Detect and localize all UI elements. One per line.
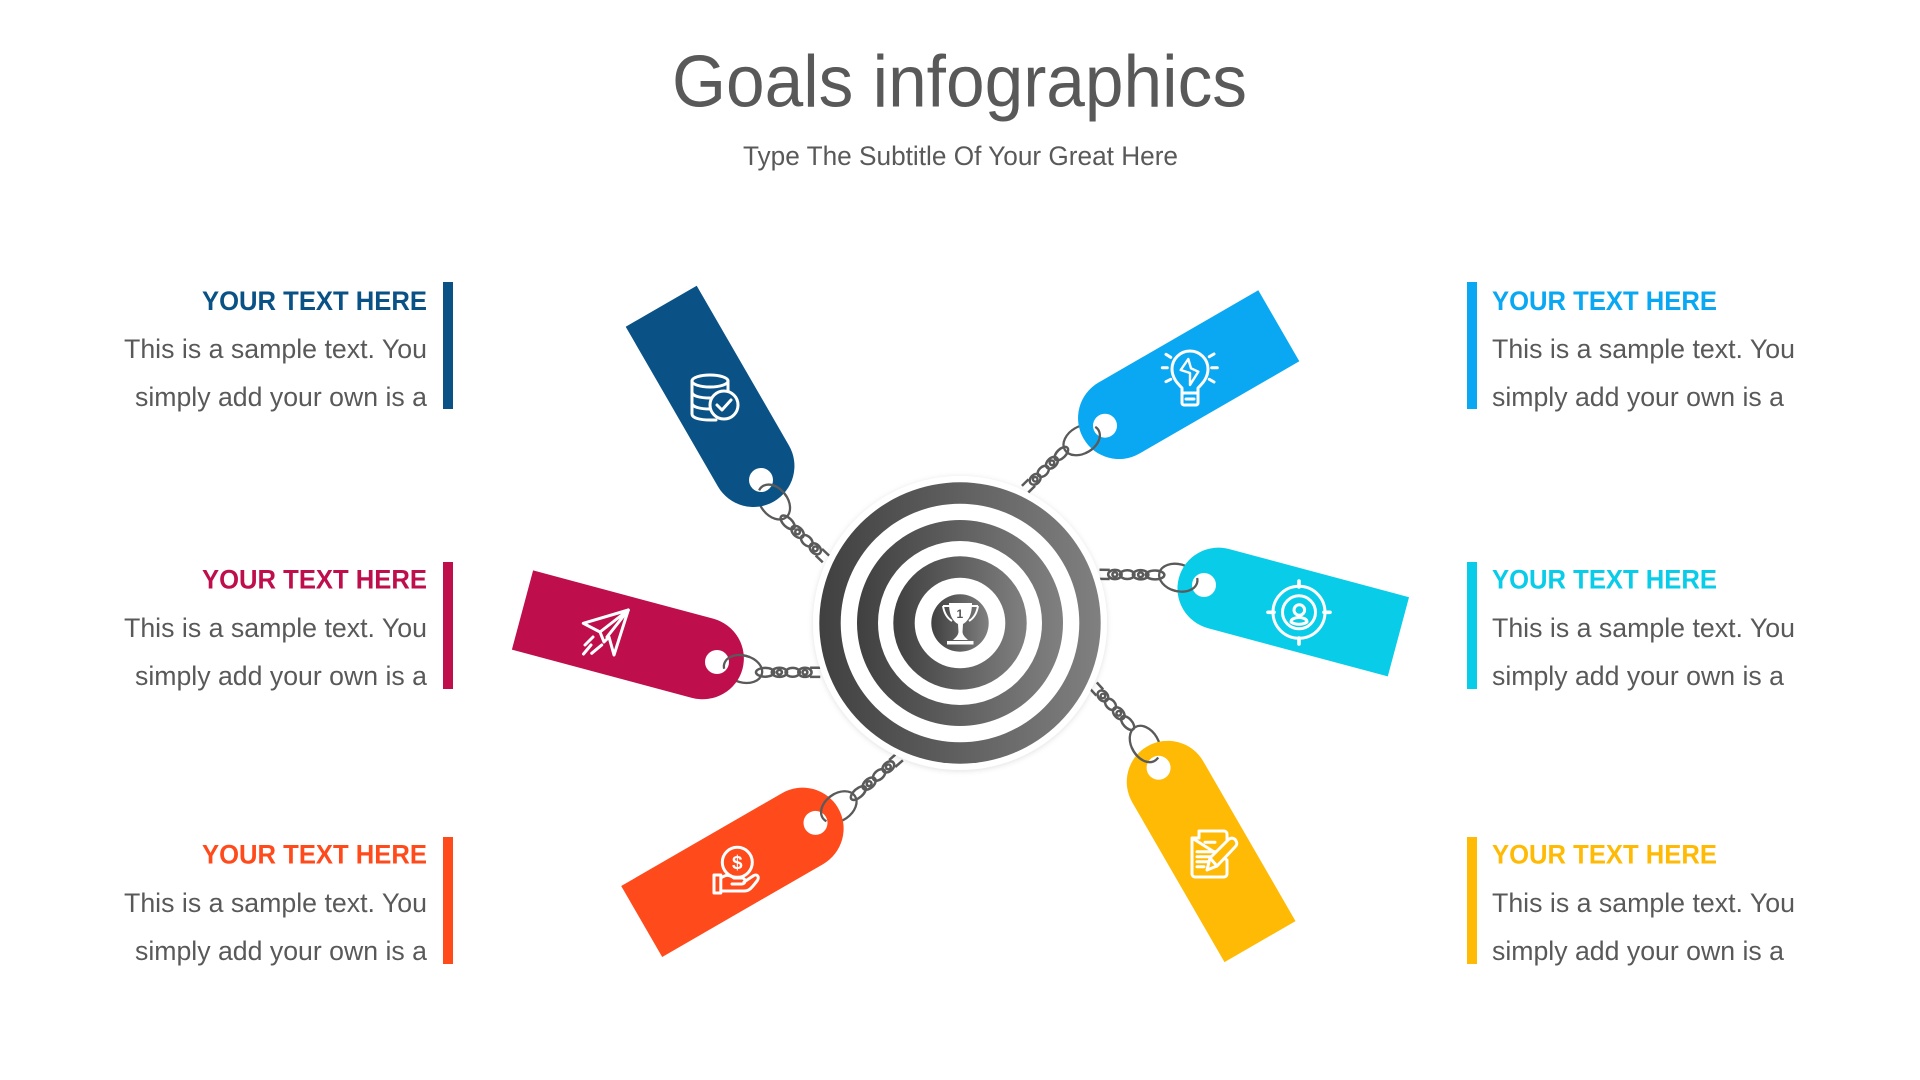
- ring 3: [893, 556, 1027, 690]
- heading: YOUR TEXT HERE: [1492, 564, 1717, 594]
- text block: bottom right: [1467, 837, 1795, 966]
- tag: light blue idea: [1022, 290, 1299, 492]
- tag shape: [1168, 538, 1409, 676]
- body line 2: simply add your own is a: [1492, 936, 1784, 966]
- chain: [778, 513, 829, 562]
- ring: [751, 478, 797, 526]
- heading: YOUR TEXT HERE: [202, 840, 427, 870]
- ring 1: [819, 482, 1101, 764]
- heading: YOUR TEXT HERE: [1492, 286, 1717, 316]
- halo: [813, 476, 1107, 770]
- ring: [721, 651, 765, 687]
- chain: [756, 668, 820, 677]
- chain: [1099, 570, 1164, 580]
- ring: [1124, 720, 1166, 768]
- ring front: [815, 794, 844, 822]
- chain: [1022, 444, 1071, 492]
- body line 1: This is a sample text. You: [1492, 613, 1795, 643]
- accent bar: [1467, 282, 1477, 409]
- ring front: [1076, 426, 1105, 453]
- tag: crimson paper plane: [512, 570, 820, 709]
- trophy number: 1: [956, 607, 963, 621]
- tag shape: [1112, 726, 1296, 962]
- dollar sign: $: [732, 853, 743, 874]
- accent bar: [1467, 562, 1477, 689]
- text block: top left: [124, 282, 453, 412]
- target: [813, 476, 1107, 770]
- icon: money hand: [714, 847, 758, 893]
- ring: [1058, 419, 1105, 461]
- tag: navy database: [626, 286, 829, 562]
- text block: middle left: [124, 562, 453, 691]
- icon: target person: [1268, 581, 1330, 644]
- tag shape: [626, 286, 809, 522]
- heading: YOUR TEXT HERE: [202, 564, 427, 594]
- icon: database check: [692, 375, 738, 420]
- hole: [705, 650, 729, 674]
- tag: cyan target person: [1099, 538, 1409, 676]
- chain: [848, 753, 903, 803]
- text block: middle right: [1467, 562, 1795, 691]
- ring: [815, 785, 863, 829]
- heading: YOUR TEXT HERE: [1492, 840, 1717, 870]
- text block: bottom left: [124, 837, 453, 966]
- ring front: [723, 651, 750, 674]
- tag: orange money hand: [621, 753, 903, 957]
- ring: [1156, 560, 1201, 596]
- hole: [749, 468, 773, 492]
- tag shape: [512, 570, 753, 709]
- hole: [804, 811, 828, 835]
- ring 2: [857, 520, 1063, 726]
- tag: yellow document: [1090, 682, 1296, 962]
- body line 2: simply add your own is a: [135, 661, 427, 691]
- accent bar: [443, 282, 453, 409]
- body line 1: This is a sample text. You: [124, 888, 427, 918]
- body line 1: This is a sample text. You: [1492, 334, 1795, 364]
- hole: [1093, 414, 1117, 438]
- accent bar: [443, 837, 453, 964]
- body line 1: This is a sample text. You: [124, 334, 427, 364]
- accent bar: [443, 562, 453, 689]
- body line 2: simply add your own is a: [135, 936, 427, 966]
- body line 2: simply add your own is a: [135, 382, 427, 412]
- subtitle: Type The Subtitle Of Your Great Here: [743, 141, 1178, 171]
- hole: [1192, 573, 1216, 597]
- bullseye: [931, 594, 989, 652]
- body line 2: simply add your own is a: [1492, 661, 1784, 691]
- tag shape: [1063, 290, 1299, 474]
- ring front: [758, 478, 787, 508]
- icon: paper plane: [583, 610, 628, 655]
- chain: [1090, 682, 1137, 732]
- text block: top right: [1467, 282, 1795, 412]
- accent bar: [1467, 837, 1477, 964]
- hole: [1147, 756, 1171, 780]
- body line 1: This is a sample text. You: [124, 613, 427, 643]
- title: Goals infographics: [672, 42, 1247, 122]
- heading: YOUR TEXT HERE: [202, 286, 427, 316]
- icon: document pencil: [1192, 831, 1237, 877]
- ring front: [1132, 739, 1159, 768]
- icon: trophy: [943, 603, 978, 644]
- ring front: [1172, 572, 1198, 596]
- icon: light bulb: [1162, 351, 1217, 405]
- tag shape: [621, 773, 859, 957]
- body line 1: This is a sample text. You: [1492, 888, 1795, 918]
- body line 2: simply add your own is a: [1492, 382, 1784, 412]
